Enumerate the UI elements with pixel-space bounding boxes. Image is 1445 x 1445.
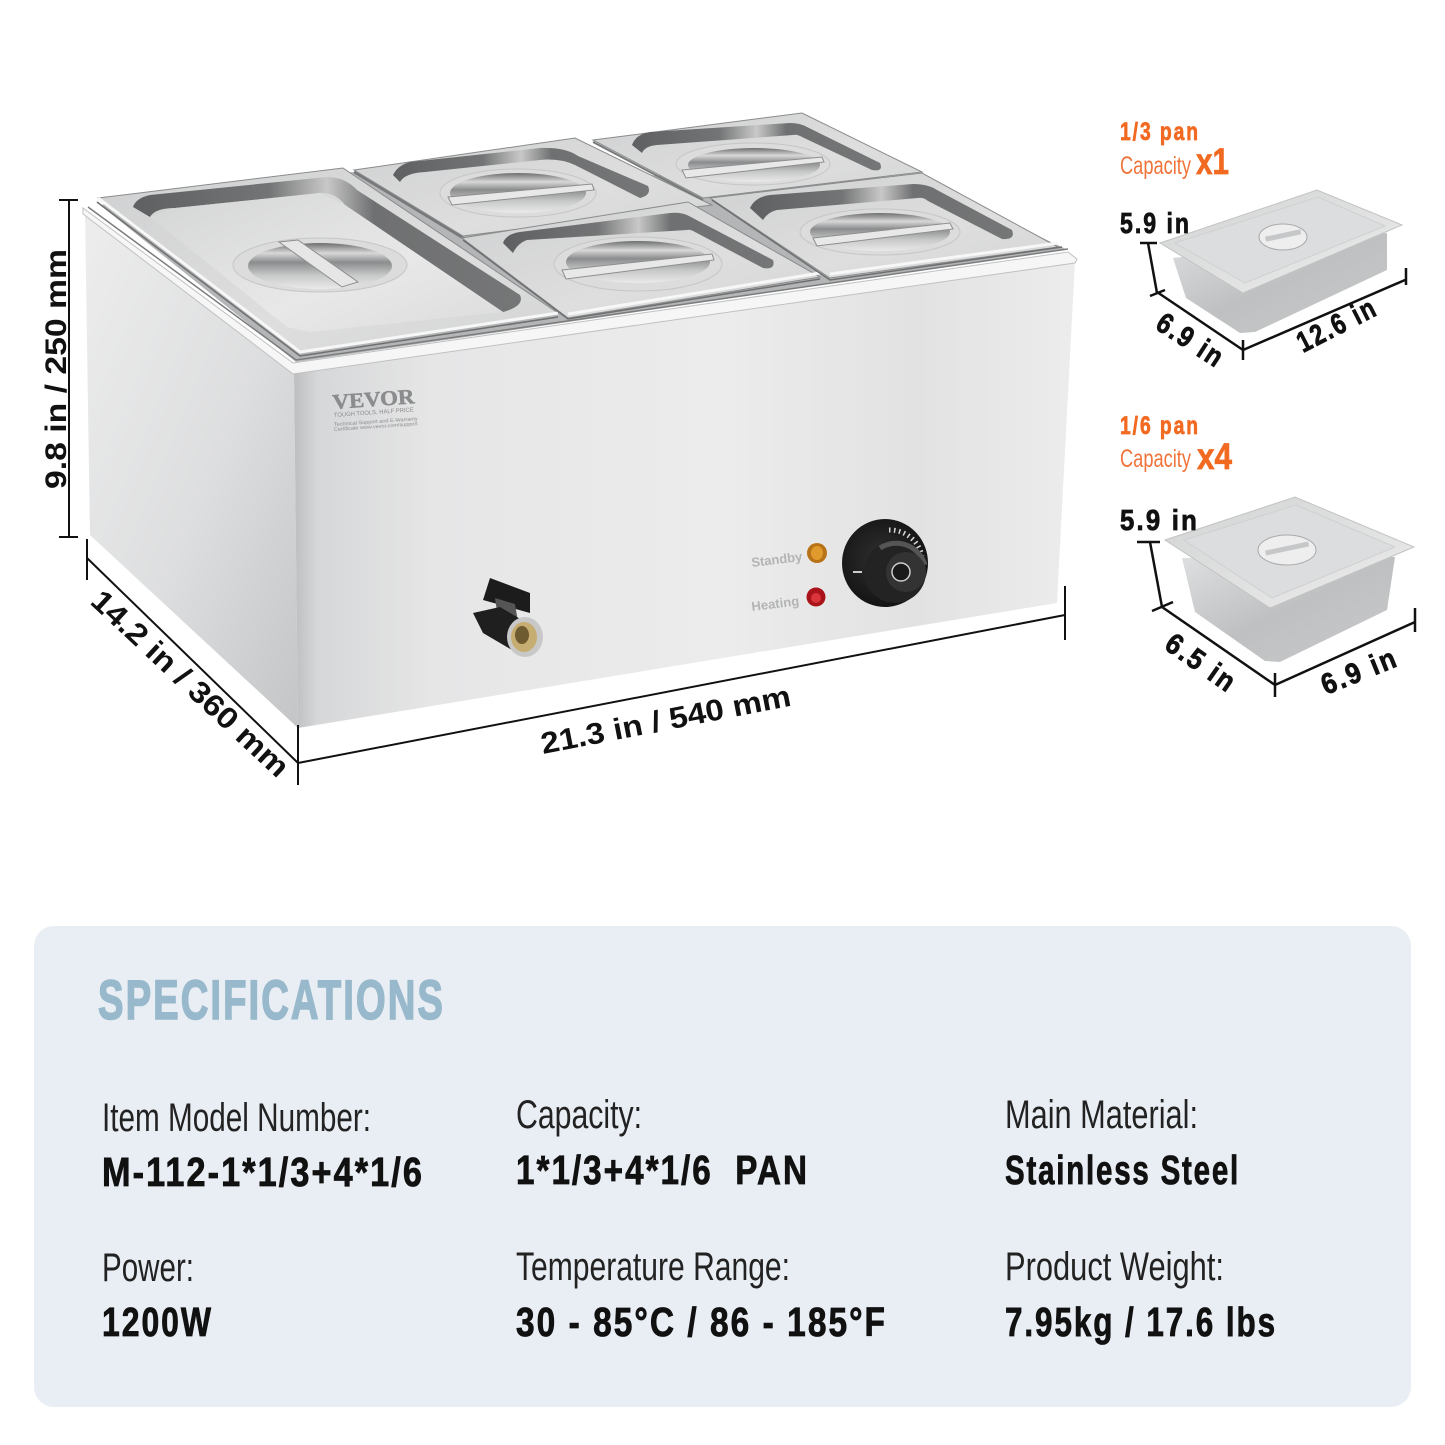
spec: temperature range: [516, 1245, 887, 1345]
VEVOR logo: Technical Support and E-Warranty: [334, 416, 418, 428]
warmer body front face: [294, 261, 1075, 728]
spec: main material: Stainless Steel: [1005, 1147, 1240, 1193]
warmer body left side: [85, 212, 298, 728]
small pan lid front right: [710, 173, 1062, 280]
1/3 pan heading: Capacity: [1120, 152, 1191, 180]
1/6 pan heading: Capacity: [1120, 445, 1191, 473]
spec: product weight: Product Weight:: [1005, 1245, 1224, 1289]
spec: temperature range: 30 - 85°C / 86 - 185°F: [516, 1299, 887, 1345]
panel: specifications: [34, 926, 1411, 1407]
1/6 pan dimensions: 6.5 in: [1159, 628, 1243, 700]
dimension: depth: [84, 539, 298, 785]
temperature knob: [842, 519, 928, 607]
1/3 pan dimensions: 5.9 in: [1120, 208, 1191, 240]
1/3 pan heading: [1120, 118, 1229, 182]
top rim: [83, 172, 1077, 374]
1/6 pan heading: [1120, 412, 1232, 477]
drain valve: [473, 578, 543, 657]
spec: product weight: 7.95kg / 17.6 lbs: [1005, 1299, 1277, 1345]
heating label and light: [751, 588, 826, 614]
1/6 pan dimensions: 5.9 in: [1120, 505, 1199, 537]
spec: item model number: [102, 1096, 424, 1195]
product: food warmer: [83, 113, 1077, 728]
small pan lid back right: [593, 113, 922, 200]
standby label and light: [751, 543, 827, 570]
standby label and light: Standby: [751, 549, 804, 570]
spec: capacity: Capacity:: [516, 1093, 642, 1137]
1/6 pan heading: 1/6 pan: [1120, 412, 1200, 440]
dimension: width: [298, 586, 1065, 763]
spec: main material: [1005, 1093, 1240, 1193]
spec: main material: Main Material:: [1005, 1093, 1198, 1137]
1/3 pan dimensions: 6.9 in: [1150, 307, 1231, 375]
1/6 pan illustration: [1165, 497, 1414, 662]
1/3 pan heading: x1: [1196, 141, 1229, 182]
small pan lid front middle: [462, 202, 820, 319]
spec: item model number: M-112-1*1/3+4*1/6: [102, 1149, 424, 1195]
1/3 pan illustration: [1160, 190, 1402, 333]
VEVOR logo: [332, 384, 419, 433]
1/6 pan dimensions: [1120, 505, 1415, 701]
spec: product weight: [1005, 1245, 1277, 1345]
spec: capacity: [516, 1093, 809, 1193]
dimension: height: 9.8 in / 250 mm: [40, 249, 73, 489]
VEVOR logo: TOUGH TOOLS, HALF PRICE: [334, 407, 414, 419]
1/3 pan dimensions: 12.6 in: [1292, 292, 1383, 359]
spec: power: Power:: [102, 1246, 194, 1290]
VEVOR logo: Certificate www.vevor.com/support: [334, 421, 419, 433]
dimension: width: 21.3 in / 540 mm: [538, 680, 794, 761]
1/6 pan dimensions: 6.9 in: [1317, 642, 1403, 701]
dimension: depth: 14.2 in / 360 mm: [84, 584, 295, 784]
spec: capacity: 1*1/3+4*1/6 PAN: [516, 1147, 809, 1193]
VEVOR logo: VEVOR: [332, 384, 416, 414]
large pan lid: [97, 168, 558, 356]
1/3 pan heading: 1/3 pan: [1120, 118, 1200, 146]
spec: power: 1200W: [102, 1299, 213, 1345]
dimension: height: [40, 200, 78, 537]
spec: temperature range: Temperature Range:: [516, 1245, 790, 1289]
spec: item model number: Item Model Number:: [102, 1096, 371, 1140]
heating label and light: Heating: [751, 593, 800, 614]
heading: specifications: SPECIFICATIONS: [98, 968, 445, 1031]
1/6 pan heading: x4: [1197, 436, 1232, 477]
small pan lid back middle: [354, 138, 712, 238]
spec: power: [102, 1246, 213, 1345]
1/3 pan dimensions: [1120, 208, 1406, 375]
